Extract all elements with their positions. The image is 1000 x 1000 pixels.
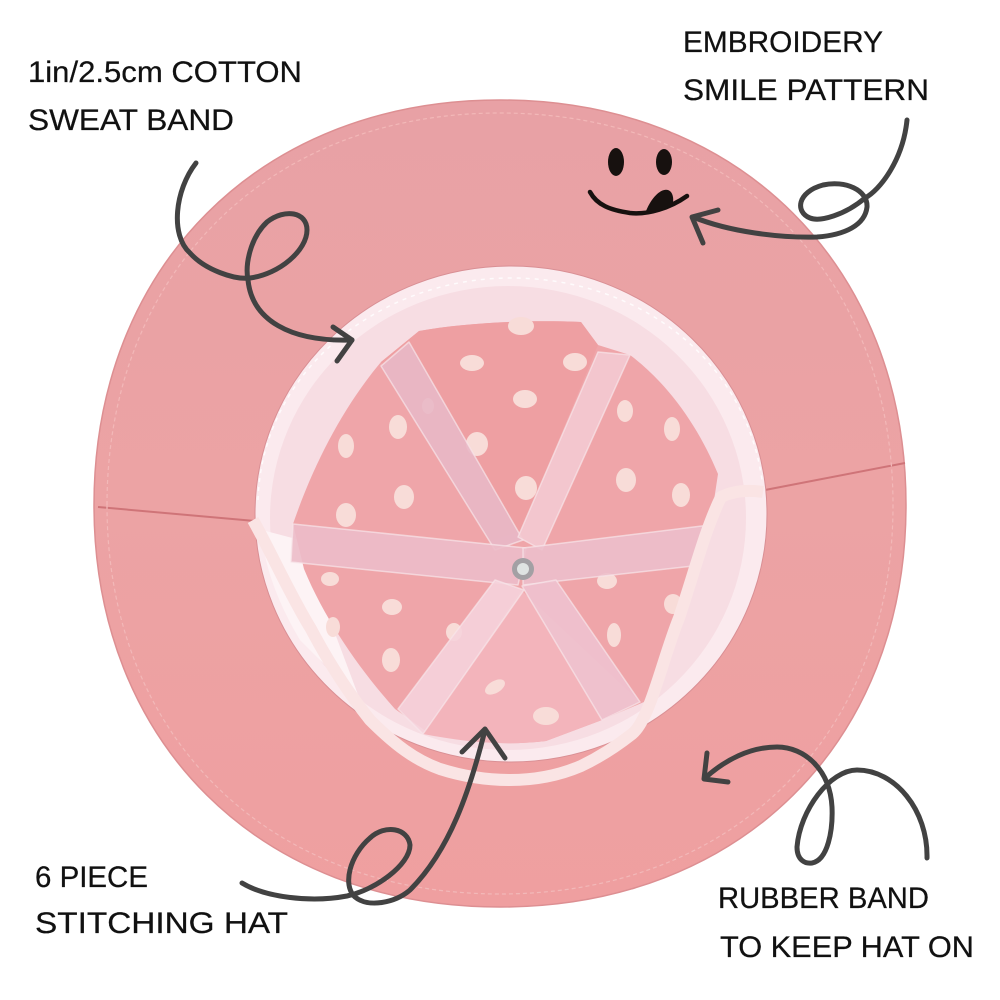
label: rubber band: TO KEEP HAT ON <box>720 931 974 964</box>
label: sweat band <box>28 56 302 137</box>
hat crown with white sweat band <box>255 266 767 762</box>
label: rubber band: RUBBER BAND <box>718 882 929 915</box>
label: sweat band: SWEAT BAND <box>28 104 234 137</box>
label: stitching: STITCHING HAT <box>35 907 288 940</box>
arrow: stitching <box>242 729 505 903</box>
hat brim <box>94 100 906 907</box>
label: embroidery: SMILE PATTERN <box>683 74 929 107</box>
six translucent seam strips <box>291 342 710 734</box>
label: rubber band <box>718 882 974 964</box>
label: embroidery <box>683 26 929 107</box>
label: sweat band: 1in/2.5cm COTTON <box>28 56 302 89</box>
label: embroidery: EMBROIDERY <box>683 26 883 59</box>
arrow: sweat band <box>177 163 352 361</box>
rubber band <box>253 491 763 780</box>
arrow: rubber band <box>704 747 927 863</box>
mesh panels showing dotted lining <box>293 321 718 743</box>
label: stitching <box>35 861 288 940</box>
arrow: embroidery <box>692 120 907 243</box>
label: stitching: 6 PIECE <box>35 861 148 894</box>
embroidery smile <box>590 148 687 213</box>
center rivet <box>512 558 534 580</box>
polka dots lining <box>321 317 690 725</box>
